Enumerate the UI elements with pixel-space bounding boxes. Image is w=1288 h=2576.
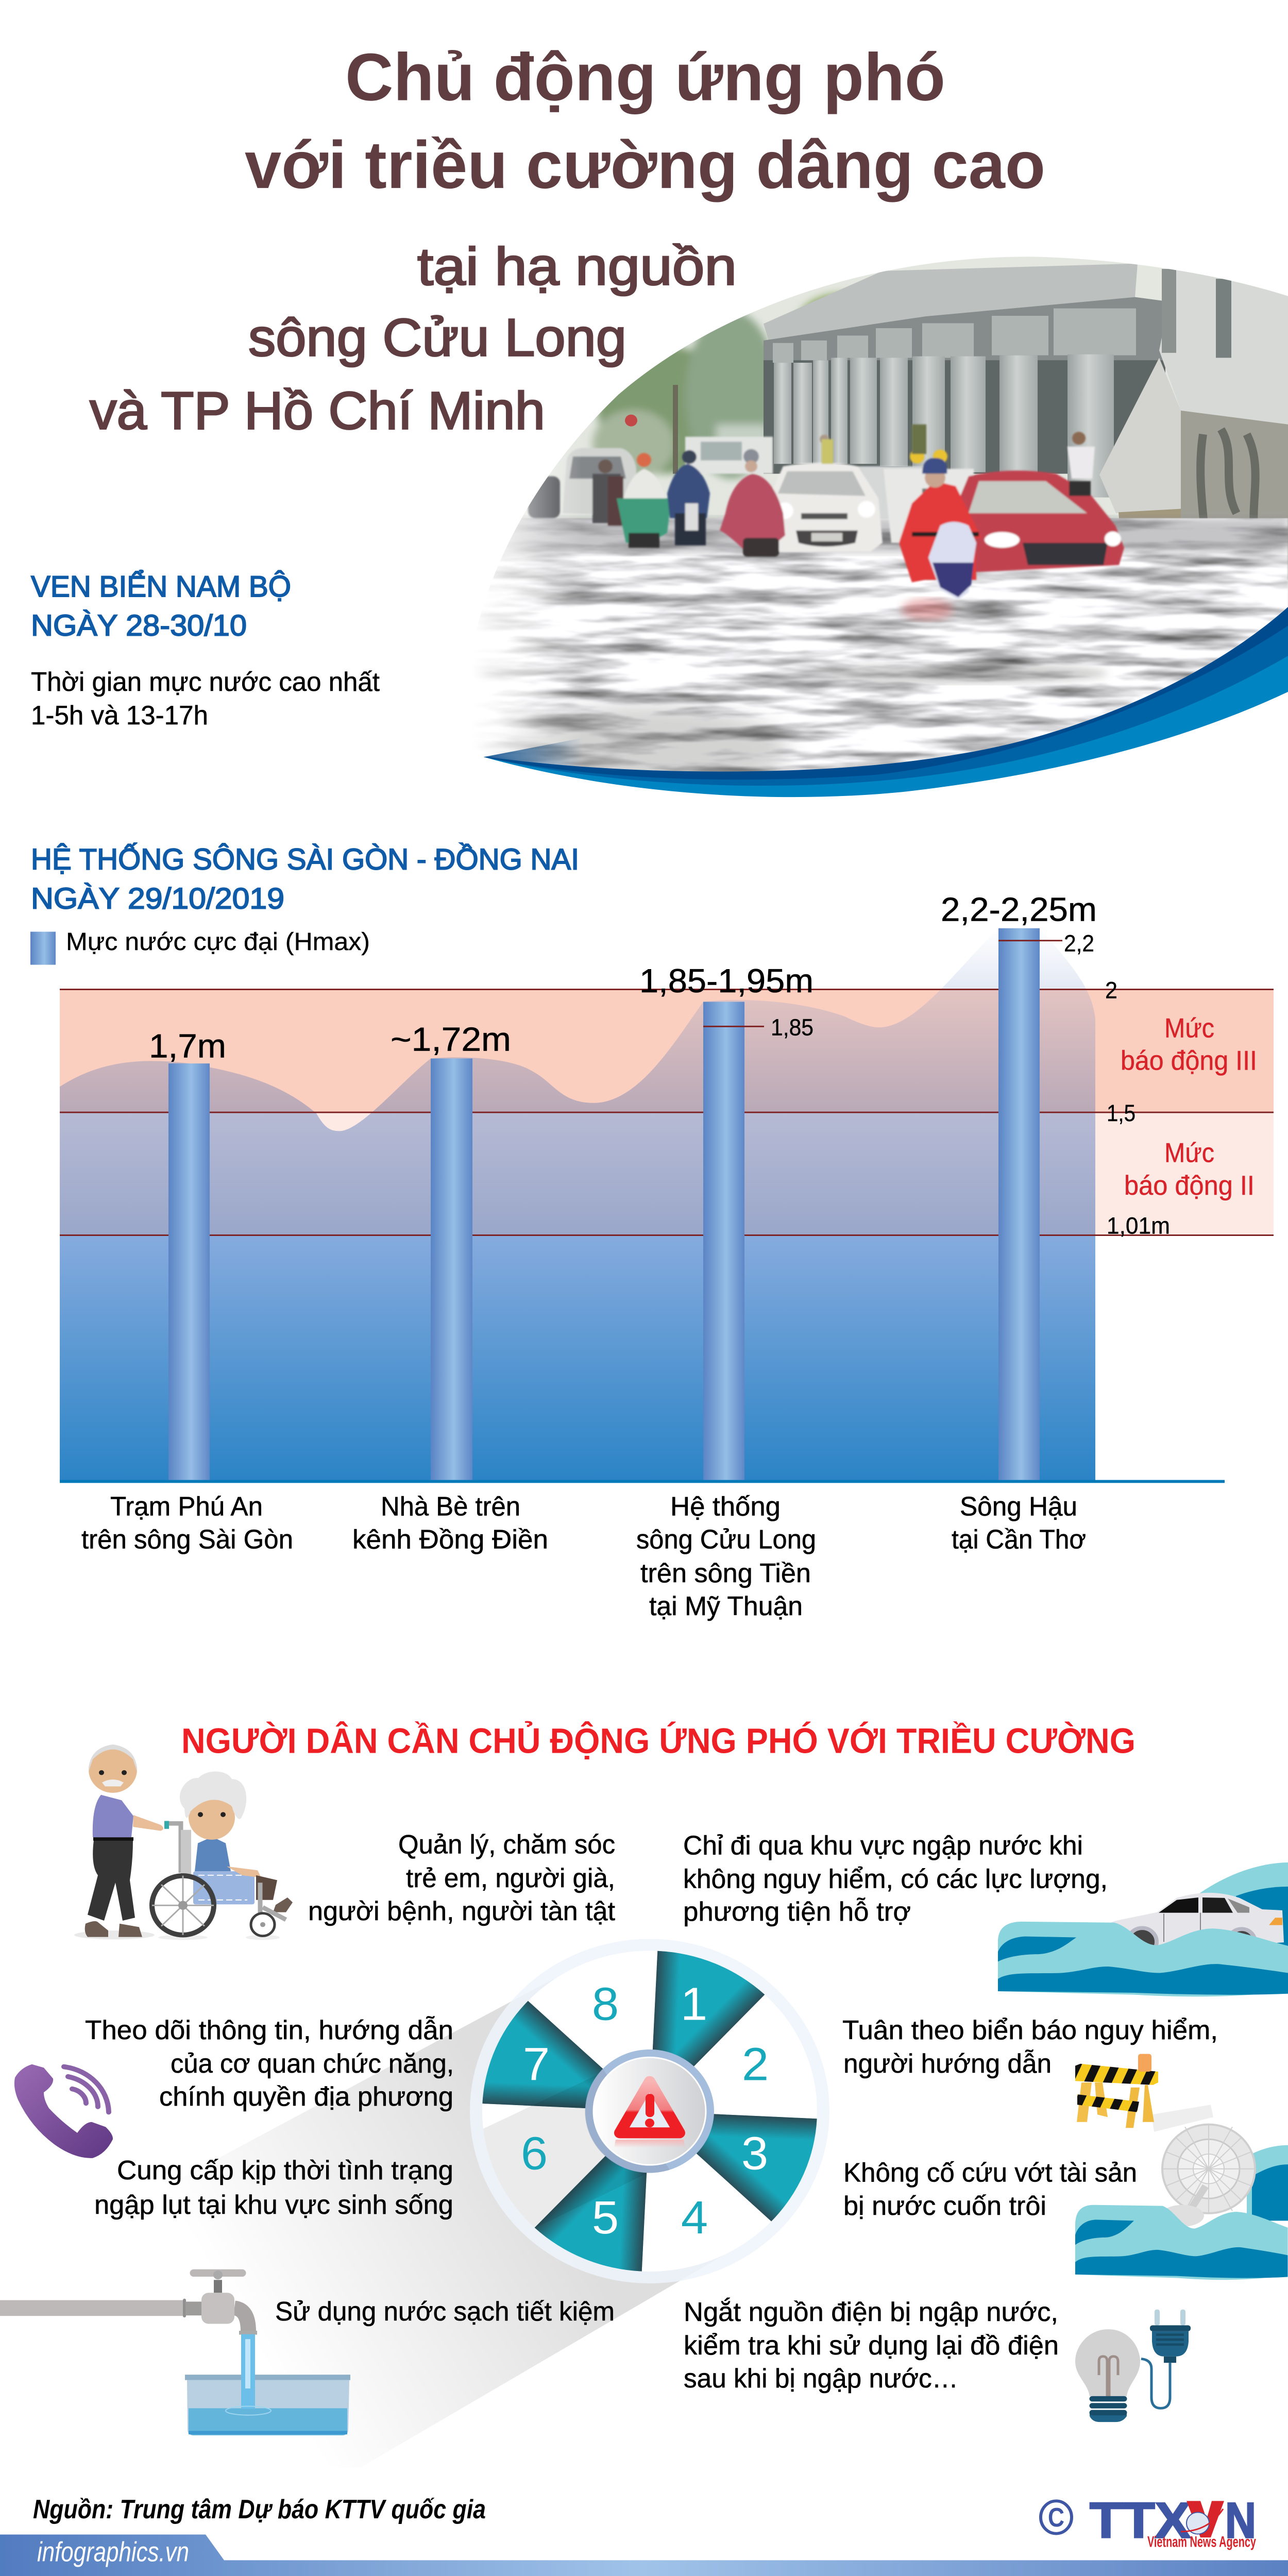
title: với triều cường dâng cao [245, 128, 1045, 202]
value labels: ~1,72m [391, 1021, 511, 1058]
text: item report [94, 2156, 453, 2220]
text: item flooded area: phương tiện hỗ trợ [683, 1897, 911, 1927]
numbers: 2 [742, 2038, 769, 2090]
scale labels: 2,2 [1064, 930, 1094, 957]
value labels: 1,85-1,95m [639, 963, 814, 1000]
vehicles and people [528, 425, 1124, 600]
chart heading [31, 843, 579, 915]
station labels: sông Cửu Long [636, 1525, 816, 1554]
text: item care [308, 1830, 615, 1926]
red car [953, 470, 1124, 572]
icon: elderly couple with wheelchair [74, 1744, 293, 1940]
icon: road barrier [1075, 2054, 1213, 2132]
numbers: 3 [741, 2128, 768, 2179]
station labels: kênh Đồng Điền [352, 1525, 548, 1554]
station labels: Sông Hậu [960, 1492, 1077, 1521]
text: item flooded area [683, 1831, 1108, 1927]
logo: TTXVN: C [1048, 2503, 1064, 2533]
coastal tide note: VEN BIỂN NAM BỘ [31, 570, 291, 603]
numbers: 4 [681, 2192, 708, 2244]
text: item flooded area: không nguy hiểm, có các lực lượng, [683, 1865, 1108, 1894]
station labels: tại Cần Thơ [952, 1525, 1086, 1554]
water wave area [60, 928, 1095, 1481]
wheel [258, 1939, 829, 2364]
section heading: NGƯỜI DÂN CẦN CHỦ ĐỘNG ỨNG PHÓ VỚI TRIỀU CƯỜNG [181, 1721, 1136, 1760]
text: item electricity: kiểm tra khi sử dụng lại đồ điện [684, 2331, 1059, 2361]
coastal tide note: NGÀY 28-30/10 [31, 609, 247, 642]
right wall [1159, 267, 1288, 425]
wheel long shadow [0, 1979, 730, 2467]
standing people [910, 450, 924, 463]
icon: phone [14, 2064, 113, 2158]
logo: TTXVN: TTX [1090, 2493, 1191, 2549]
hub [585, 2049, 714, 2173]
text: item monitor [85, 2015, 454, 2112]
wedges [482, 1951, 817, 2272]
numbers: 6 [521, 2128, 548, 2179]
value labels [149, 891, 1097, 1065]
icon: car in flood [998, 1862, 1288, 1996]
bars [168, 928, 1040, 1480]
text: item monitor: chính quyền địa phương [159, 2082, 453, 2112]
title [245, 40, 1045, 202]
text: item belongings [843, 2158, 1137, 2221]
text: item signs: người hướng dẫn [843, 2049, 1052, 2079]
station labels: Hệ thống [670, 1492, 781, 1521]
alert labels: Mức [1164, 1138, 1214, 1168]
footer bar [0, 2535, 1288, 2576]
alert labels: báo động III [1121, 1046, 1257, 1076]
rider pink [720, 474, 785, 550]
overpass deck [764, 263, 1138, 341]
legend [30, 928, 370, 965]
water [453, 518, 1288, 790]
scale labels [771, 930, 1170, 1239]
subtitle: sông Cửu Long [248, 308, 626, 367]
text: item electricity: Ngắt nguồn điện bị ngập nước, [684, 2297, 1058, 2327]
logo: TTXVN [1041, 2493, 1256, 2550]
icon: bulb and plug [1075, 2310, 1191, 2422]
text: item care: Quản lý, chăm sóc [398, 1830, 615, 1859]
chart heading: HỆ THỐNG SÔNG SÀI GÒN - ĐỒNG NAI [31, 843, 579, 876]
numbers: 7 [523, 2038, 550, 2090]
station labels: tại Mỹ Thuận [649, 1591, 803, 1621]
value labels: 2,2-2,25m [941, 891, 1097, 928]
text: item flooded area: Chỉ đi qua khu vực ngập nước khi [683, 1831, 1083, 1860]
rider red [899, 481, 981, 582]
source: Nguồn: Trung tâm Dự báo KTTV quốc gia [33, 2495, 486, 2524]
station labels: Nhà Bè trên [381, 1492, 520, 1521]
text: item signs [842, 2015, 1218, 2079]
chart: water levels [60, 891, 1274, 1483]
text: item water: Sử dụng nước sạch tiết kiệm [275, 2297, 615, 2327]
text: item signs: Tuân theo biển báo nguy hiểm, [842, 2015, 1218, 2045]
alert labels: Mức [1164, 1013, 1214, 1043]
swoosh: blue waves under photo [484, 602, 1288, 797]
scale labels: 1,5 [1107, 1100, 1136, 1126]
text: item electricity: sau khi bị ngập nước… [684, 2364, 958, 2394]
text: item belongings: Không cố cứu vớt tài sản [843, 2158, 1137, 2188]
numbers: 8 [592, 1978, 619, 2030]
chart heading: NGÀY 29/10/2019 [31, 883, 284, 915]
station labels: trên sông Tiền [640, 1558, 811, 1588]
footer site name: infographics.vn [37, 2536, 189, 2567]
scale labels: 1,01m [1107, 1213, 1170, 1239]
station labels: Trạm Phú An [110, 1492, 263, 1521]
text: item monitor: Theo dõi thông tin, hướng dẫn [85, 2015, 453, 2045]
numbers: 5 [592, 2192, 619, 2244]
numbers: 1 [681, 1978, 707, 2030]
icon: water tap and basin [0, 2270, 350, 2435]
photo: flooded street [453, 247, 1288, 794]
text: item monitor: của cơ quan chức năng, [171, 2049, 454, 2079]
alert labels [1121, 1013, 1257, 1201]
text: item belongings: bị nước cuốn trôi [843, 2191, 1046, 2221]
subtitle: tại hạ nguồn [417, 237, 737, 296]
numbers [521, 1978, 769, 2244]
white hatchback [769, 463, 883, 552]
hub shadow [258, 2073, 648, 2364]
scale labels: 1,85 [771, 1014, 814, 1040]
text: item care: người bệnh, người tàn tật [308, 1896, 615, 1926]
rider navy [667, 464, 710, 518]
subtitle [90, 237, 737, 440]
coastal tide note [31, 570, 380, 731]
station labels [81, 1492, 1086, 1621]
coastal tide note: 1-5h và 13-17h [31, 701, 208, 731]
pillars [764, 309, 1165, 498]
alert labels: báo động II [1124, 1171, 1255, 1201]
icon: fan in flood [1075, 2125, 1288, 2280]
value labels: 1,7m [149, 1028, 226, 1065]
icon: warning triangle [614, 2081, 685, 2148]
logo: TTXVN: N [1225, 2493, 1256, 2549]
rider green [623, 469, 666, 498]
text: item care: trẻ em, người già, [406, 1863, 615, 1893]
station labels: trên sông Sài Gòn [81, 1525, 293, 1554]
text: item electricity [684, 2297, 1059, 2394]
scale labels: 2 [1105, 977, 1117, 1004]
subtitle: và TP Hồ Chí Minh [90, 381, 545, 440]
text: item report: ngập lụt tại khu vực sinh sống [94, 2190, 453, 2220]
coastal tide note: Thời gian mực nước cao nhất [31, 667, 380, 697]
title: Chủ động ứng phó [345, 40, 945, 115]
alert bands [60, 989, 1274, 1235]
legend: Mực nước cực đại (Hmax) [66, 928, 370, 956]
text: item report: Cung cấp kịp thời tình trạng [117, 2156, 453, 2185]
